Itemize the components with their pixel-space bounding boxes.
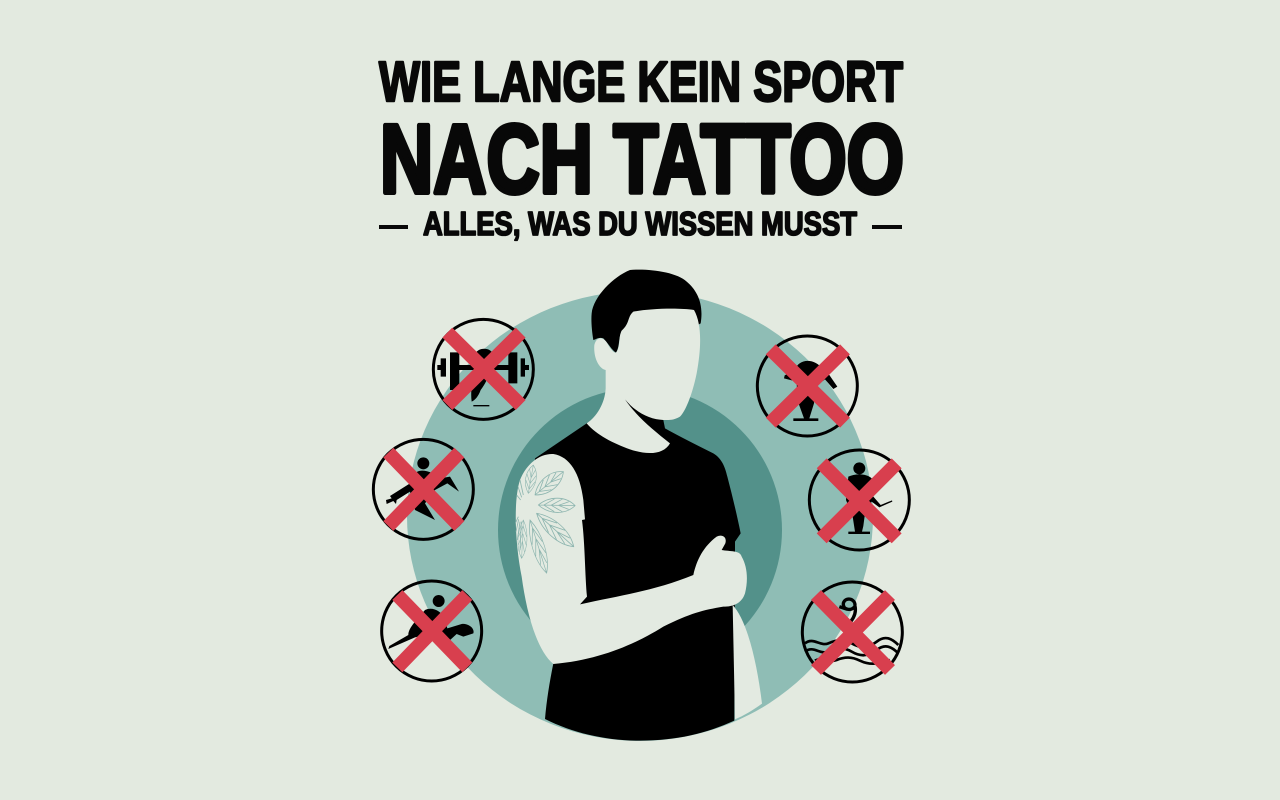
icon: ball sport prohibited: [809, 450, 909, 550]
large teal circle: [407, 291, 873, 741]
tattoo flower: [515, 464, 578, 575]
red cross: [771, 349, 845, 423]
head and neck: [587, 309, 700, 453]
player silhouette: [846, 462, 892, 534]
red cross: [397, 595, 467, 667]
icon ring: [373, 439, 473, 539]
shirt: [527, 399, 741, 741]
icon: running prohibited: [373, 439, 473, 539]
runner silhouette: [388, 595, 474, 649]
red cross: [388, 453, 459, 526]
subtitle dash right: [872, 225, 902, 229]
icon ring: [433, 319, 533, 419]
athlete silhouette: [784, 361, 837, 421]
person with tattoo: [515, 270, 762, 741]
inner dark teal circle: [498, 388, 782, 672]
swimmer ring and waves: [805, 599, 898, 664]
icon: sprinting prohibited: [382, 581, 482, 681]
icon: barbell prohibited: [433, 319, 533, 419]
title line 2: NACH TATTOO: [380, 104, 904, 214]
barbell and athlete: [437, 349, 529, 406]
red cross: [447, 333, 521, 405]
tattooed arm: [516, 454, 747, 664]
other arm: [733, 605, 762, 719]
athlete silhouette: [386, 457, 459, 520]
icon ring: [809, 450, 909, 550]
icon ring: [757, 336, 857, 436]
title line 1: WIE LANGE KEIN SPORT: [379, 50, 903, 113]
red cross: [822, 463, 897, 538]
icon: swimming prohibited: [802, 582, 902, 682]
subtitle dash left: [379, 225, 408, 229]
title: [379, 50, 904, 242]
red cross: [816, 595, 890, 670]
icon: fitness prohibited: [757, 336, 857, 436]
icon ring: [382, 581, 482, 681]
subtitle: ALLES, WAS DU WISSEN MUSST: [423, 205, 857, 242]
hair: [591, 270, 701, 353]
icon ring: [802, 582, 902, 682]
